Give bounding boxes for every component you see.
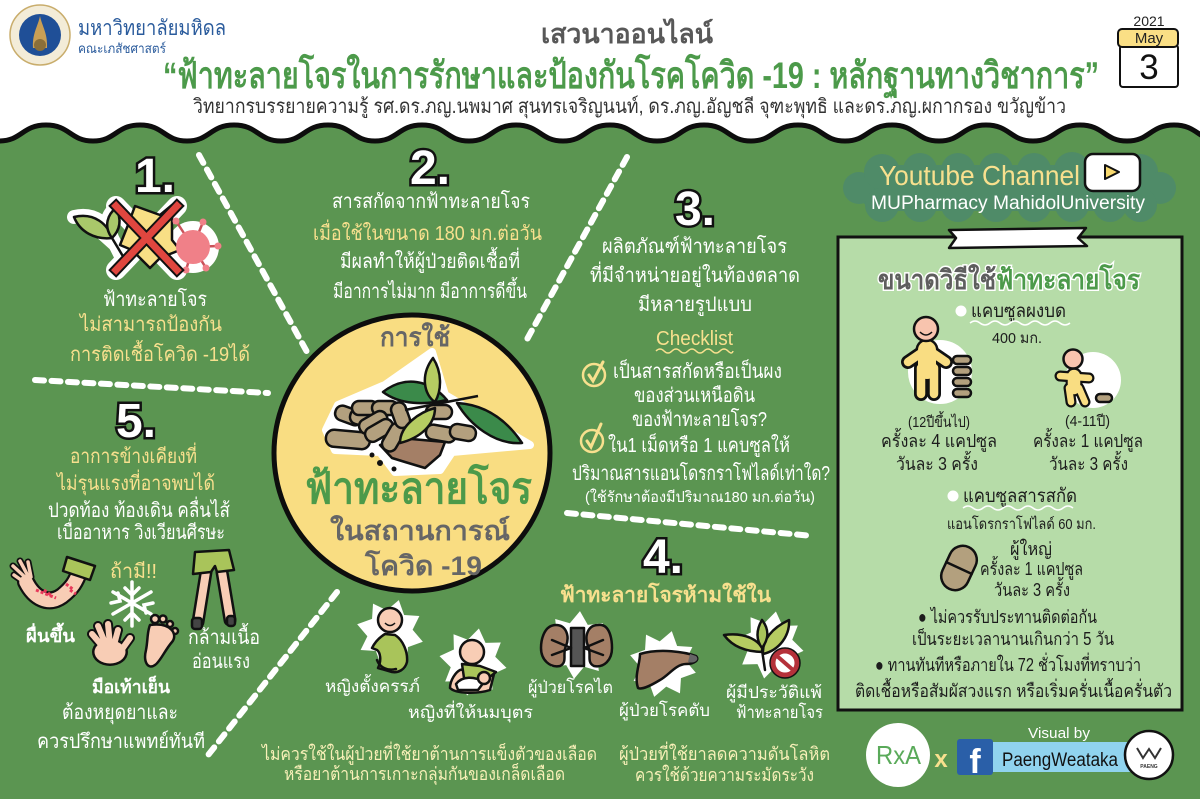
center subtitle: ในสถานการณ์: [330, 515, 510, 546]
Facebook name bar: [957, 739, 1135, 781]
label: pregnant woman: หญิงตั้งครรภ์: [325, 674, 420, 696]
text block 3: มีหลายรูปแบบ: [638, 294, 752, 317]
icon: legs in shorts: [192, 550, 235, 629]
checklist item 2: (ใช้รักษาต้องมีปริมาณ180 มก.ต่อวัน): [585, 488, 815, 506]
icon: breastfeeding woman: [434, 623, 512, 701]
section 1: [70, 150, 250, 366]
calendar date icon: 3: [1139, 48, 1159, 87]
section 4: [260, 531, 830, 785]
section 3: [572, 183, 830, 506]
Facebook name bar: f: [969, 743, 981, 781]
checklist heading: Checklist: [656, 328, 733, 350]
checklist item 1: ของส่วนเหนือดิน: [634, 385, 755, 407]
calendar date icon: May: [1135, 30, 1164, 47]
advice text: ควรปรึกษาแพทย์ทันที: [37, 730, 205, 753]
panel: dosage: [838, 228, 1182, 710]
adult dose: (12ปีขึ้นไป): [908, 411, 970, 431]
panel heading: [878, 263, 1140, 295]
ribbon: [949, 228, 1087, 248]
text block 3: ที่มีจำหน่ายอยู่ในท้องตลาด: [590, 261, 800, 288]
logo: RxA: [866, 723, 930, 787]
text block 5: อาการข้างเคียงที่: [70, 442, 197, 468]
icon: cold foot: [145, 615, 178, 667]
logo: Mahidol University seal: [10, 5, 70, 65]
text block 5: [48, 442, 230, 544]
powder capsule subheading: แคบซูลผงบด: [971, 301, 1066, 322]
extract dose: แอนโดรกราโฟไลด์ 60 มก.: [947, 515, 1096, 533]
center heading top: การใช้: [380, 322, 450, 352]
caution notes: [855, 606, 1172, 701]
text block 1: [70, 288, 250, 366]
extract usage: วันละ 3 ครั้ง: [994, 577, 1070, 600]
text block 1: ฟ้าทะลายโจร: [103, 288, 207, 311]
adult dose: [881, 411, 997, 474]
icon: check mark 1: [583, 362, 605, 386]
center title: ฟ้าทะลายโจร: [305, 462, 532, 513]
logo: Paeng: [1125, 731, 1173, 779]
number 1: 1.: [135, 150, 175, 203]
number 3: 3.: [675, 183, 715, 236]
label: weak muscles: อ่อนแรง: [192, 651, 250, 673]
number 4: 4.: [643, 531, 683, 584]
caution: blood pressure drugs: [619, 741, 830, 785]
checklist item 1: [613, 358, 782, 431]
powder dose: 400 มก.: [992, 330, 1042, 347]
label: allergy history: [726, 683, 823, 722]
Facebook name bar: PaengWeataka: [1002, 750, 1118, 771]
extract usage: [980, 538, 1083, 600]
dashed dividers: [35, 155, 813, 759]
icon: snowflake: [111, 582, 153, 626]
caution notes: เป็นระยะเวลานานเกินกว่า 5 วัน: [912, 627, 1114, 649]
caution notes: ● ทานทันทีหรือภายใน 72 ชั่วโมงที่ทราบว่า: [875, 652, 1141, 675]
advice text: ต้องหยุดยาและ: [62, 702, 178, 725]
icon: play button: [1085, 154, 1140, 191]
text block 3: [590, 235, 800, 317]
icon: plant allergy: [724, 606, 809, 684]
checklist item 2: [572, 432, 830, 506]
caution: blood pressure drugs: ผู้ป่วยที่ใช้ยาลดความดันโลหิต: [619, 741, 830, 765]
warning label: ถ้ามี!!: [110, 561, 157, 583]
center circle: [274, 315, 550, 591]
channel title: Youtube Channel: [879, 160, 1080, 191]
illustration: capsules, powder and leaves: [325, 352, 530, 472]
icon: cold hand: [92, 624, 130, 666]
section 2: [313, 142, 542, 303]
YouTube channel badge: [843, 152, 1176, 222]
panel heading: ขนาดวิธีใช้: [878, 264, 996, 295]
panel heading: ฟ้าทะลายโจร: [996, 263, 1140, 295]
text block 2: มีผลทำให้ผู้ป่วยติดเชื้อที่: [340, 247, 520, 274]
icon: large capsule: [937, 541, 981, 595]
label: liver patient: ผู้ป่วยโรคตับ: [619, 700, 710, 721]
checklist item 2: ปริมาณสารแอนโดรกราโฟไลด์เท่าใด?: [572, 462, 830, 485]
event label: เสวนาออนไลน์: [541, 18, 714, 49]
advice text: [37, 702, 205, 753]
icon: no prevention, leaf and virus crossed: [74, 205, 222, 274]
label: weak muscles: กล้ามเนื้อ: [188, 623, 260, 649]
extract usage: ผู้ใหญ่: [1010, 538, 1052, 560]
heading 4: ฟ้าทะลายโจรห้ามใช้ใน: [560, 582, 772, 607]
calendar date icon: 2021: [1133, 13, 1165, 29]
child dose: วันละ 3 ครั้ง: [1049, 451, 1128, 474]
caution: anticoagulants: หรือยาต้านการเกาะกลุ่มกันของเกล็ดเลือด: [284, 762, 565, 785]
adult dose: วันละ 3 ครั้ง: [896, 451, 978, 474]
icon: kidneys: [540, 608, 614, 682]
extract capsule subheading: แคบซูลสารสกัด: [963, 486, 1077, 507]
icon: child with one capsule: [1060, 350, 1121, 408]
text block 1: การติดเชื้อโควิด -19ได้: [70, 340, 250, 366]
text block 1: ไม่สามารถป้องกัน: [78, 313, 222, 336]
number 2: 2.: [410, 142, 450, 195]
checklist item 1: ของฟ้าทะลายโจร?: [632, 408, 767, 431]
text block 5: ไม่รุนแรงที่อาจพบได้: [55, 469, 215, 496]
center subtitle: โควิด -19: [364, 549, 482, 581]
credit label: Visual by: [1028, 725, 1091, 742]
icon: pregnant woman: [348, 591, 432, 675]
caution: anticoagulants: [260, 741, 597, 785]
speakers: วิทยากรบรรยายความรู้ รศ.ดร.ภญ.นพมาศ สุนทรเจริญนนท์, ดร.ภญ.อัญชลี จุฑะพุทธิ และดร.ภญ.ผกากรอง ขวัญข้าว: [193, 95, 1066, 119]
label: weak muscles: [188, 623, 260, 673]
caution notes: ● ไม่ควรรับประทานติดต่อกัน: [918, 606, 1097, 627]
extract usage: ครั้งละ 1 แคปซูล: [980, 556, 1083, 580]
university name: มหาวิทยาลัยมหิดล: [78, 17, 226, 40]
child dose: ครั้งละ 1 แคปซูล: [1033, 428, 1143, 452]
faculty name: คณะเภสัชศาสตร์: [78, 41, 166, 56]
section 5: [13, 395, 260, 753]
channel name: MUPharmacy MahidolUniversity: [871, 193, 1146, 214]
child dose: (4-11ปี): [1065, 413, 1110, 430]
adult dose: ครั้งละ 4 แคปซูล: [881, 428, 997, 452]
center subtitle: [330, 515, 510, 581]
label: rash: ผื่นขึ้น: [26, 622, 76, 646]
caution: anticoagulants: ไม่ควรใช้ในผู้ป่วยที่ใช้ยาต้านการแข็งตัวของเลือด: [260, 741, 597, 765]
icon: adult with four capsules: [908, 317, 972, 404]
text block 5: ปวดท้อง ท้องเดิน คลื่นไส้: [48, 496, 230, 522]
number 5: 5.: [116, 395, 156, 448]
checklist item 2: ใน1 เม็ดหรือ 1 แคบซูลให้: [608, 432, 790, 458]
footer credits: [866, 723, 1173, 787]
cross sign: x: [934, 746, 948, 773]
text block 2: มีอาการไม่มาก มีอาการดีขึ้น: [333, 277, 527, 303]
caution: blood pressure drugs: ควรใช้ด้วยความระมัดระวัง: [635, 764, 814, 785]
text block 2: สารสกัดจากฟ้าทะลายโจร: [332, 190, 530, 213]
child dose: [1033, 413, 1143, 474]
cloud background: [843, 152, 1176, 222]
text block 2: [313, 190, 542, 303]
icon: arm with rash: [13, 557, 95, 600]
icon: check mark 2: [581, 424, 603, 452]
label: cold hands and feet: มือเท้าเย็น: [92, 675, 171, 697]
label: kidney patient: ผู้ป่วยโรคไต: [528, 677, 613, 698]
label: allergy history: ฟ้าทะลายโจร: [736, 702, 823, 722]
text block 5: เบื่ออาหาร วิงเวียนศีรษะ: [57, 518, 225, 544]
icon: liver: [621, 622, 705, 706]
extract capsule subheading: [948, 486, 1077, 510]
logo: Paeng: PAENG: [1140, 764, 1158, 770]
logo: RxA: RxA: [876, 740, 922, 770]
text block 2: เมื่อใช้ในขนาด 180 มก.ต่อวัน: [313, 219, 542, 245]
label: breastfeeding woman: หญิงที่ให้นมบุตร: [408, 700, 533, 723]
calendar date icon: [1118, 13, 1178, 87]
checklist item 1: เป็นสารสกัดหรือเป็นผง: [613, 358, 782, 383]
label: allergy history: ผู้มีประวัติแพ้: [726, 683, 822, 703]
text block 3: ผลิตภัณฑ์ฟ้าทะลายโจร: [602, 235, 787, 258]
